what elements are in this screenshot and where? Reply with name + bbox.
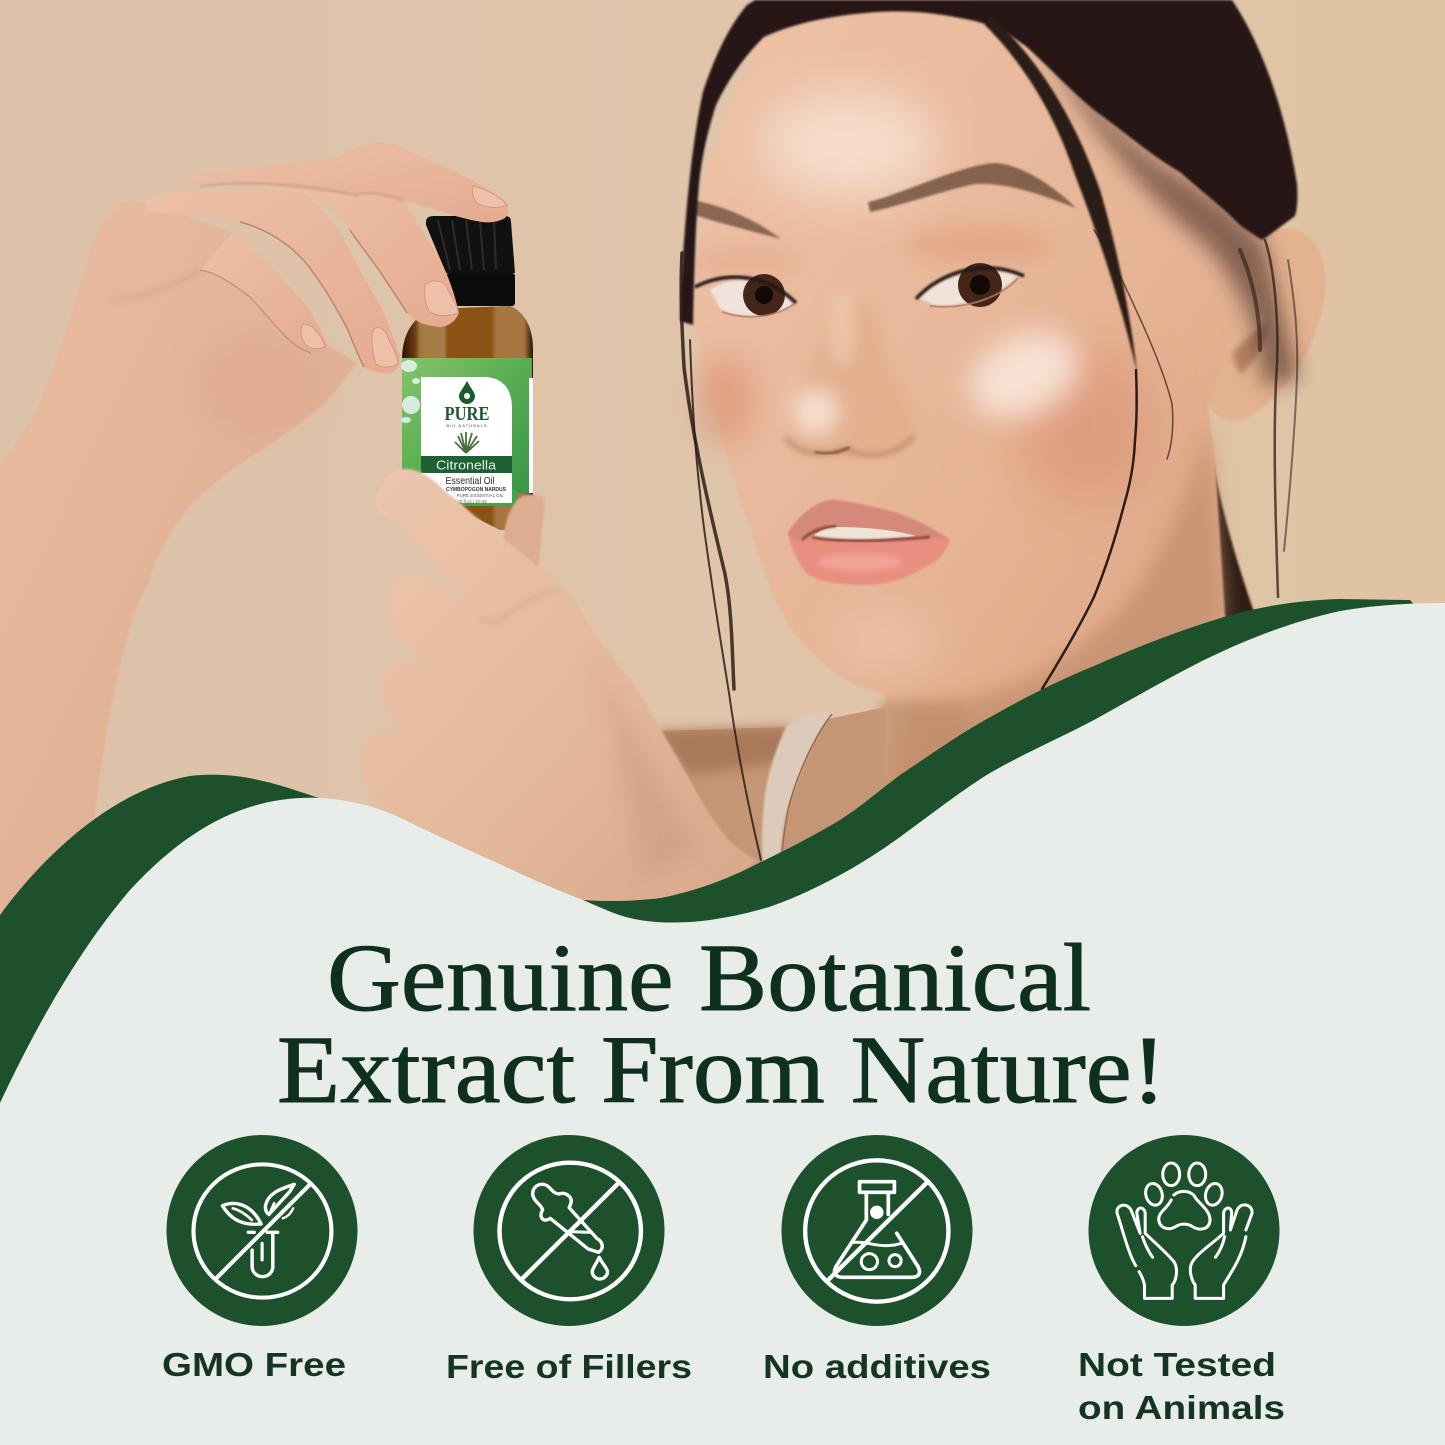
pinky edge — [200, 270, 311, 353]
nose — [785, 294, 916, 457]
icon: not tested on animals — [1088, 1135, 1280, 1326]
cheek blush left — [695, 354, 755, 446]
eyebrow right — [868, 163, 1076, 212]
hair shadow at hairline — [1040, 45, 1300, 385]
photo: woman — [655, 0, 1326, 900]
fingers over bottle — [110, 142, 508, 435]
icon: no additives — [782, 1135, 972, 1326]
finger behind bottle — [500, 495, 544, 570]
product bottle: PURE ESSENTIAL OIL — [457, 493, 504, 498]
logo drop — [459, 381, 475, 404]
bottle cap — [426, 216, 515, 273]
eyebrow left — [690, 200, 781, 239]
light content panel — [0, 603, 1445, 1445]
title: Genuine Botanical — [327, 924, 1091, 1031]
ear — [1205, 228, 1326, 421]
cheek highlight — [956, 314, 1094, 436]
icon: free of fillers — [474, 1135, 664, 1326]
eye right — [916, 263, 1024, 307]
inner ear — [1232, 322, 1268, 375]
water droplets — [401, 360, 420, 423]
forehead highlight — [760, 90, 940, 200]
pinky finger — [200, 233, 327, 353]
title: Extract From Nature! — [277, 1016, 1166, 1123]
tendon shading — [590, 650, 700, 880]
palm shading — [195, 335, 315, 435]
cap ribs — [438, 220, 496, 270]
name band — [421, 456, 512, 473]
amber glass — [402, 306, 533, 530]
fingernails — [301, 186, 507, 367]
label: Not Tested on Animals — [1078, 1346, 1285, 1426]
brand name: PURE — [444, 403, 490, 425]
cheek blush right — [1015, 345, 1155, 505]
upper hand and forearm — [0, 201, 357, 940]
face and neck skin — [693, 5, 1268, 815]
lips — [788, 500, 950, 585]
finger separation shading — [200, 183, 404, 200]
label background — [402, 358, 532, 493]
label: No additives: No additives — [763, 1348, 991, 1385]
lower hand — [360, 469, 758, 905]
palm crease — [110, 270, 200, 300]
hair strands — [681, 230, 1297, 860]
product bottle: CYMBOPOGON NARDUS — [446, 487, 507, 493]
label: GMO Free: GMO Free — [162, 1346, 346, 1383]
shoulder shadow — [655, 727, 795, 775]
label: Not Tested on Animals: on Animals — [1078, 1389, 1285, 1426]
ring finger — [146, 190, 400, 373]
neck shadow — [890, 420, 1225, 815]
curved green band — [0, 599, 1445, 1105]
product bottle — [401, 216, 533, 530]
chest and shoulder — [655, 700, 1100, 900]
middle finger — [280, 178, 459, 327]
product bottle: 0.33 fl oz | 10 ml — [454, 499, 486, 504]
eye left — [695, 274, 796, 317]
ring finger edge — [240, 222, 364, 367]
product bottle: Citronella — [436, 458, 496, 472]
neck left blend — [880, 700, 1000, 830]
hand silhouette — [360, 469, 758, 905]
index finger — [189, 142, 508, 222]
bottle collar — [446, 273, 515, 306]
product bottle: Essential Oil — [446, 476, 494, 487]
white label panel — [421, 377, 512, 503]
under-brow warmth — [690, 248, 800, 276]
title — [277, 924, 1166, 1123]
top strap — [762, 713, 832, 862]
label: Not Tested on Animals: Not Tested — [1078, 1346, 1276, 1383]
plant icon — [455, 432, 479, 453]
hair mass — [680, 0, 1297, 325]
photo background — [0, 0, 1445, 1110]
middle finger edge — [350, 230, 407, 313]
product bottle: BIO NATURALS — [446, 423, 488, 428]
knuckle shading — [479, 590, 560, 622]
icon: GMO free — [166, 1135, 358, 1326]
fringe lock — [985, 15, 1137, 372]
ponytail behind neck — [1212, 455, 1254, 625]
chin highlight — [835, 614, 935, 666]
label: Free of Fillers: Free of Fillers — [446, 1348, 692, 1385]
